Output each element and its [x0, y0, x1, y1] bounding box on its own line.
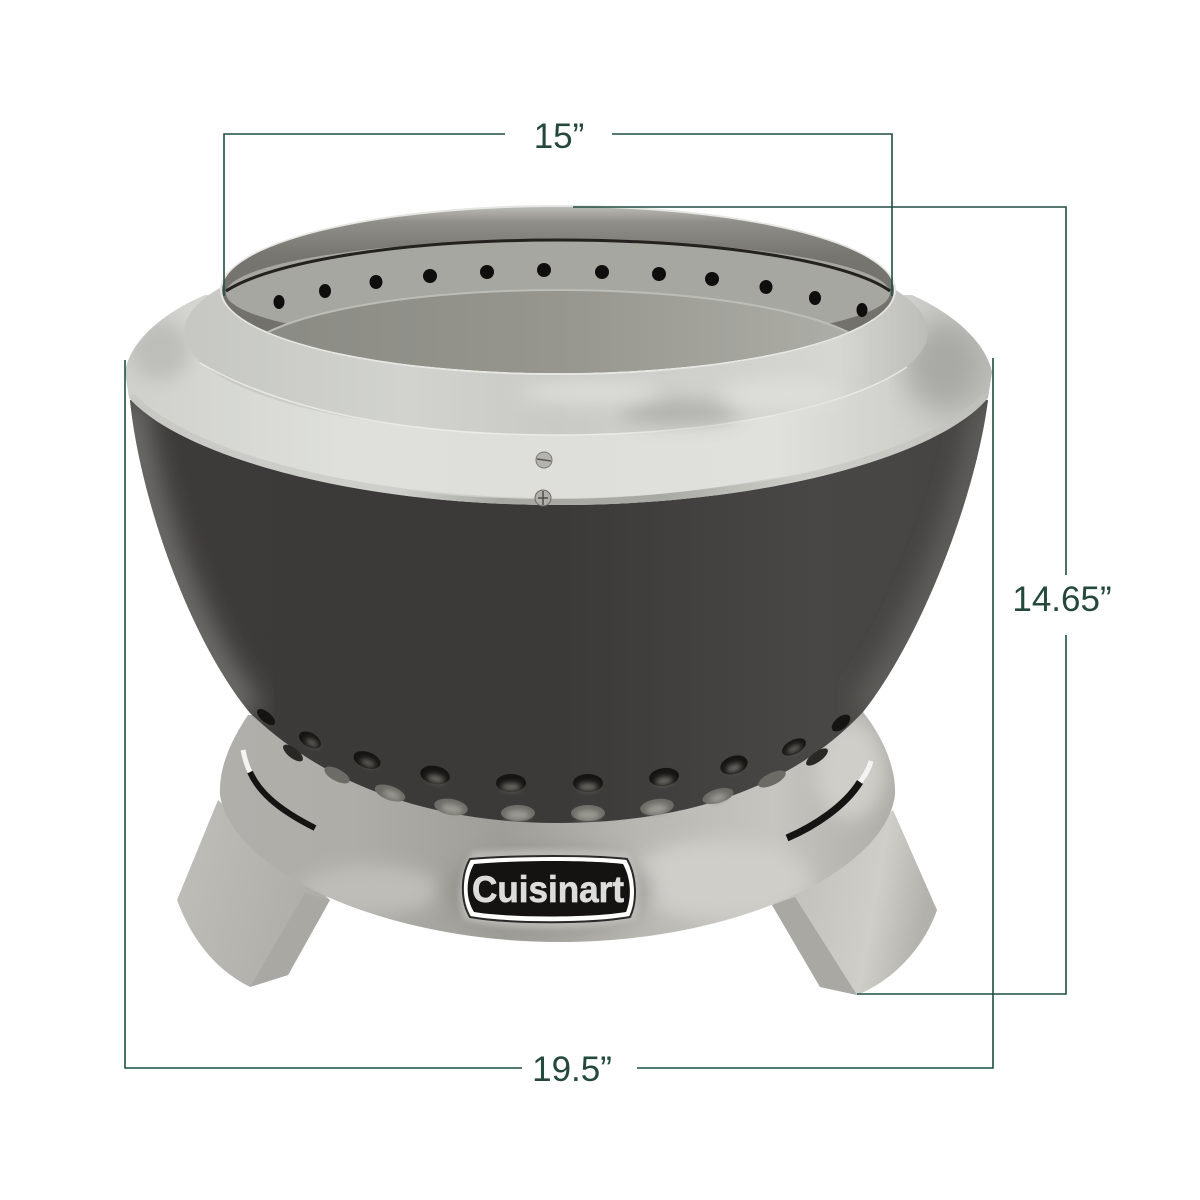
air holes: lower row	[280, 742, 830, 821]
dimension: 15 in opening width: 15”	[534, 117, 584, 156]
air holes: upper row	[254, 706, 853, 792]
logo text: Cuisinart	[472, 869, 624, 910]
dimension: 15 in opening width	[224, 117, 892, 296]
floor	[267, 289, 849, 373]
Cuisinart logo badge	[460, 849, 639, 929]
dimension: 14.65 in height: 14.65”	[1012, 580, 1112, 619]
dark groove	[226, 240, 890, 291]
collar	[184, 229, 928, 435]
bowl	[130, 400, 988, 823]
vent slot: right	[787, 761, 871, 838]
screws	[535, 452, 552, 506]
interior of pit	[220, 205, 896, 375]
perforated band	[226, 242, 890, 324]
vent slot: left	[243, 750, 315, 828]
burner holes	[274, 263, 868, 317]
right leg	[772, 810, 937, 995]
dimension: 19.5 in base width: 19.5”	[532, 1050, 612, 1089]
left leg	[177, 800, 330, 987]
base ring	[220, 712, 895, 942]
infographic: fire pit with dimensions	[124, 124, 1110, 1082]
brim	[125, 295, 992, 505]
back wall	[220, 205, 900, 375]
dimension: 14.65 in height	[573, 207, 1112, 994]
